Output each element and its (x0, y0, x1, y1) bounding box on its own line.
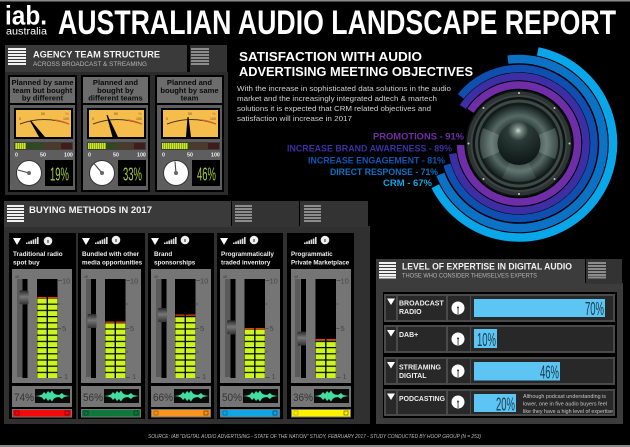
led level bar (14, 142, 73, 158)
header icons (220, 236, 258, 245)
value and waveform (291, 386, 351, 407)
vu meter: 0 (19, 117, 21, 121)
led level bar: 0 (88, 152, 91, 158)
icon: second tab menu (235, 205, 252, 222)
method title: Bundled with other (82, 251, 140, 258)
header icons (304, 236, 329, 244)
card title: different teams (88, 94, 143, 102)
label: RADIO (399, 309, 422, 316)
label: DAB+ (399, 332, 418, 339)
chart labels (287, 132, 464, 188)
arc: increase brand awareness 89% (453, 77, 586, 211)
fader and meter: 10 (130, 276, 138, 286)
icon: expertise second tab menu (588, 262, 606, 278)
heading: agency team structure: AGENCY TEAM STRUCTURE (33, 50, 160, 60)
led level bar: 100 (64, 152, 73, 158)
vu meter: 50 (41, 112, 45, 116)
fader and meter: 10 (200, 276, 208, 286)
card title: Planned and (93, 78, 138, 87)
card title: bought by same (160, 86, 219, 95)
card title: by different (22, 94, 64, 102)
fader and meter (12, 269, 72, 383)
fader and meter: 5 (62, 324, 66, 333)
bar: 10%: 10% (477, 330, 496, 350)
icon: triangle (387, 362, 395, 368)
fader and meter: dB (294, 275, 299, 279)
bar: 70%: 70% (585, 299, 604, 319)
arc: direct response 71% (440, 59, 603, 228)
led level bar: 0 (162, 152, 165, 158)
value 19%: 19% (50, 164, 69, 184)
card: programmatic private marketplace 36% (287, 233, 354, 419)
vu meter (87, 108, 146, 139)
dial (89, 160, 115, 186)
label: BROADCAST (399, 300, 444, 308)
dial (16, 160, 42, 186)
colour strip: red (12, 409, 72, 418)
chart: radial satisfaction arcs (435, 51, 613, 238)
vu meter (161, 108, 220, 139)
method title: media opportunities (82, 260, 143, 266)
led level bar: 50 (40, 152, 46, 158)
note: podcast understanding (523, 394, 613, 415)
led level bar: 100 (211, 152, 220, 158)
fader and meter: 1 (342, 372, 347, 381)
fader and meter (81, 269, 141, 383)
led level bar: 50 (187, 152, 193, 158)
heading: buying methods in 2017: BUYING METHODS IN 2017 (29, 205, 152, 216)
card title: bought by (97, 86, 135, 95)
value and waveform (220, 386, 280, 407)
vu meter: 0 (166, 117, 168, 121)
fader and meter: 1 (132, 372, 136, 381)
logo: iab australia: iab. (5, 0, 47, 30)
arc: promotions 91% (461, 85, 578, 202)
fader and meter: 1 (272, 372, 276, 381)
vu meter: % (138, 111, 142, 116)
arc: crm 67% (435, 51, 613, 238)
icon: triangle (387, 330, 395, 336)
text block: satisfaction intro (237, 84, 451, 123)
value and waveform: 74% (14, 392, 34, 404)
colour strip: orange (151, 409, 211, 418)
label: crm: CRM - 67% (383, 178, 432, 188)
label: increase engagement: INCREASE ENGAGEMENT - 81% (308, 156, 445, 166)
value 46%: 46% (197, 164, 216, 184)
value and waveform (81, 386, 141, 407)
panel: buying methods (4, 201, 370, 424)
fader and meter: 1 (202, 372, 206, 381)
fader and meter (220, 269, 280, 383)
card title: Planned and (167, 78, 212, 87)
card title: Planned by same (11, 78, 74, 87)
vu meter: 100 (63, 117, 69, 121)
icon: info dial (452, 302, 464, 314)
bar: 20%: 20% (496, 394, 515, 414)
label: PODCASTING (399, 396, 446, 403)
label: STREAMING (399, 364, 442, 372)
subheading: across broadcast and streaming: ACROSS BROADCAST & STREAMING (33, 61, 147, 68)
note: podcast understanding: Although podcast understanding is (523, 394, 606, 400)
led level bar: 50 (113, 152, 119, 158)
fader and meter: 10 (270, 276, 278, 286)
fader and meter: dB (15, 275, 20, 279)
panel: level of expertise (376, 259, 623, 424)
dial (163, 160, 189, 186)
method title: Traditional radio (13, 251, 63, 258)
fader and meter: 10 (340, 276, 349, 286)
value and waveform (151, 386, 211, 407)
icon: agency second tab menu (191, 48, 209, 65)
colour strip: green (81, 409, 141, 418)
row: streaming digital 46% (384, 357, 615, 385)
card: bundled with other media opportunities 56% (78, 233, 145, 419)
header icons (82, 236, 120, 245)
fader and meter: dB (154, 275, 159, 279)
fader and meter: 5 (340, 324, 345, 333)
icon: info dial (452, 364, 464, 378)
subheading: those who consider themselves experts: THOSE WHO CONSIDER THEMSELVES EXPERTS (402, 272, 537, 280)
value and waveform: 66% (153, 392, 173, 404)
method title: Brand (154, 251, 172, 258)
vu meter: 50 (114, 112, 118, 116)
vu meter: 100 (210, 117, 216, 121)
icon: third tab menu (304, 205, 321, 222)
label: increase brand awareness: INCREASE BRAND AWARENESS - 89% (287, 144, 452, 154)
row: broadcast radio 70% (384, 294, 615, 322)
bar: 46%: 46% (540, 362, 559, 382)
card title: team but bought (13, 86, 73, 95)
icon: speaker (466, 90, 572, 197)
card: traditional radio spot buy 74% (9, 233, 76, 419)
fader and meter: 5 (270, 324, 274, 333)
panel: agency team structure (5, 45, 228, 195)
fader and meter: dB (223, 275, 228, 279)
heading: satisfaction with audio: ADVERTISING MEETING OBJECTIVES (239, 65, 473, 79)
label: direct response: DIRECT RESPONSE - 71% (330, 167, 438, 177)
card title: team (181, 94, 199, 102)
method title: Private Marketplace (291, 260, 350, 266)
colour strip: blue (220, 409, 280, 418)
icon: buying menu (7, 205, 24, 222)
note: podcast understanding: like they have a high level of expertise (523, 409, 613, 415)
icon: triangle (387, 394, 395, 400)
method title: Programmatic (291, 251, 333, 258)
icon: triangle (387, 298, 395, 305)
led level bar (87, 142, 146, 158)
icon: expertise menu (379, 262, 396, 278)
colour strip: yellow (291, 409, 351, 418)
value and waveform: 50% (222, 392, 242, 404)
text block: satisfaction intro: satisfaction will increase in 2017 (237, 114, 352, 123)
fader and meter (291, 269, 351, 383)
fader and meter: 5 (200, 324, 204, 333)
text block: satisfaction intro: solutions it is expected that CRM related objectives and (237, 104, 431, 113)
card: planned and bought by same team 46% (155, 75, 224, 192)
bar: 10% (474, 329, 497, 350)
card: programmatically traded inventory 50% (217, 233, 283, 419)
icon: info dial (452, 396, 464, 408)
label: DIGITAL (399, 373, 427, 380)
led level bar (161, 142, 220, 158)
card: planned by same team but bought by different 19% (8, 75, 77, 192)
fader and meter: 5 (130, 324, 134, 333)
vu meter: % (212, 111, 216, 116)
value and waveform: 36% (293, 392, 313, 404)
icon: info dial (452, 332, 464, 346)
note: podcast understanding: lower, one in five audio buyers feel (523, 402, 607, 408)
led level bar: 0 (15, 152, 18, 158)
text block: satisfaction intro: With the increase in sophisticated data solutions in the audio (237, 84, 451, 93)
vu meter: 0 (92, 117, 94, 121)
bar: 46% (474, 362, 560, 382)
row: podcasting 20% (384, 389, 615, 416)
method title: sponsorships (154, 260, 196, 266)
arc: increase engagement 81% (447, 68, 594, 218)
value and waveform: 56% (83, 392, 103, 404)
logo: iab australia: australia (6, 26, 47, 38)
value 33%: 33% (123, 164, 142, 184)
fader and meter: 10 (62, 276, 70, 286)
vu meter: 50 (188, 112, 192, 116)
header icons (151, 236, 189, 245)
footer: source: SOURCE: IAB "DIGITAL AUDIO ADVERTISING - STATE OF THE NATION" STUDY, FEBRUARY 2017 - STUDY CONDUCTED BY HOOP GROUP (N = 253) (148, 434, 481, 440)
vu meter: 100 (136, 117, 142, 121)
card: planned and bought by different teams 33% (81, 75, 150, 192)
heading: level of expertise in digital audio: LEVEL OF EXPERTISE IN DIGITAL AUDIO (402, 262, 572, 272)
vu meter (14, 108, 73, 139)
method title: Programmatically (221, 251, 274, 258)
fader and meter (151, 269, 211, 383)
icon: agency menu (8, 48, 26, 65)
text block: satisfaction intro: market and the increasingly integrated adtech & martech (237, 94, 437, 103)
header icons (13, 237, 52, 245)
fader and meter: dB (84, 275, 89, 279)
fader and meter: 1 (64, 372, 68, 381)
bar: 20% (474, 394, 516, 414)
vu meter: % (65, 111, 69, 116)
heading: satisfaction with audio: SATISFACTION WITH AUDIO (239, 50, 422, 64)
value and waveform (12, 386, 72, 407)
bar: 70% (474, 299, 605, 319)
method title: traded inventory (221, 260, 271, 266)
method title: spot buy (13, 260, 40, 266)
row: dab+ 10% (384, 325, 615, 353)
label: promotions: PROMOTIONS - 91% (373, 132, 464, 142)
led level bar: 100 (137, 152, 146, 158)
card: brand sponsorships 66% (148, 233, 214, 419)
